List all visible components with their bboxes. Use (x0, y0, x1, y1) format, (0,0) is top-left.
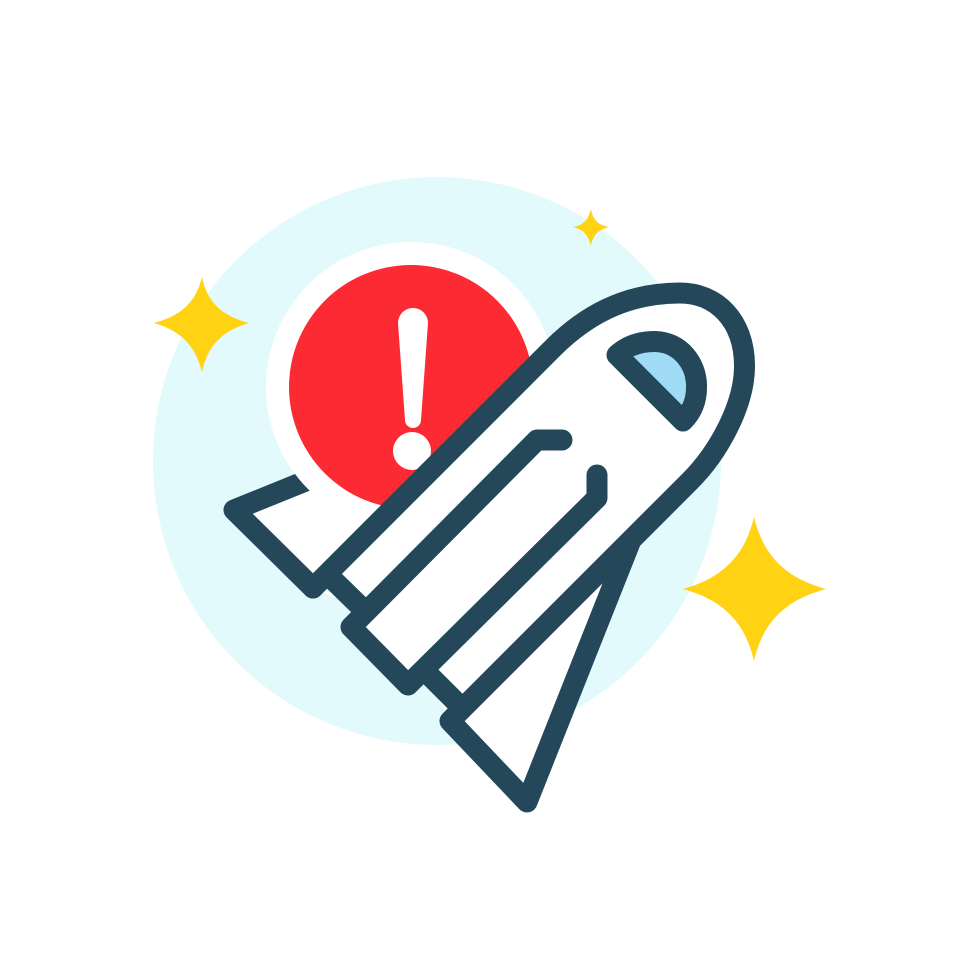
booster band lower (424, 670, 462, 708)
icon: sparkle right (683, 517, 826, 661)
right wing outline (450, 525, 637, 802)
icon: alert badge (266, 242, 556, 532)
window (617, 342, 697, 421)
icon: rocket shuttle (313, 293, 745, 802)
right wing fill (450, 525, 637, 802)
background circle (153, 177, 721, 745)
booster band upper (327, 574, 365, 611)
icon: sparkle top (573, 209, 609, 246)
hull fill (313, 293, 745, 721)
booster lines and cap (351, 440, 597, 685)
icon: left wing (234, 476, 400, 588)
icon: sparkle left (154, 277, 249, 372)
hull outline (313, 293, 745, 721)
